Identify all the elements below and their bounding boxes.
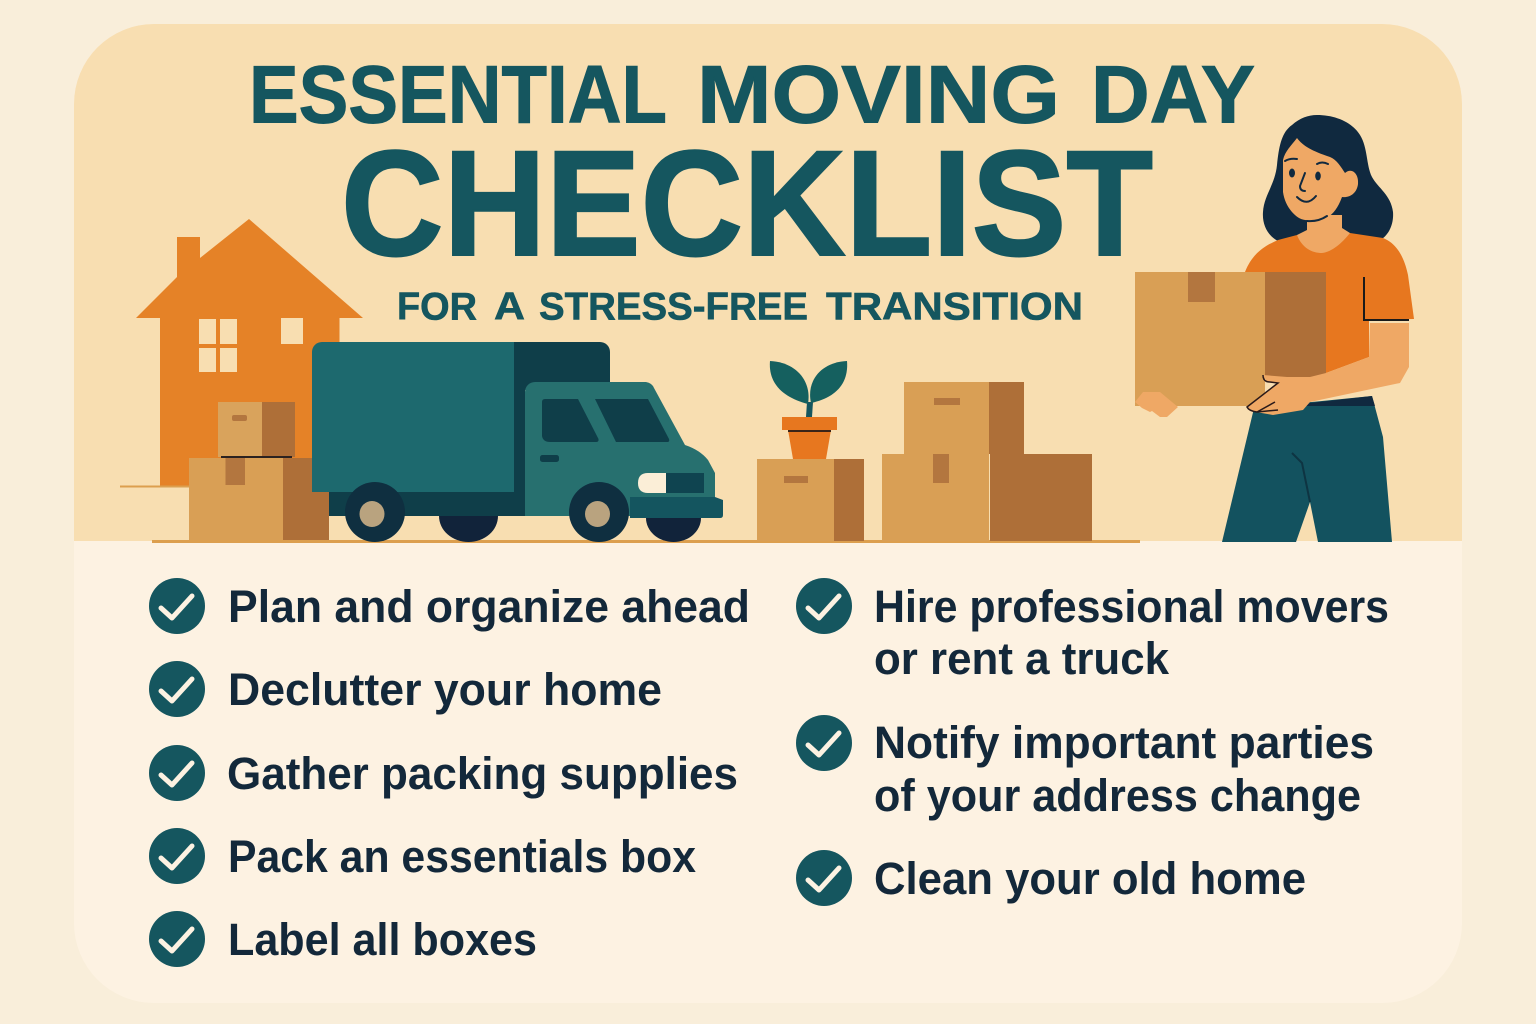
facial features <box>1285 159 1328 221</box>
face <box>1283 138 1358 221</box>
item: hire professional movers: Hire professional movers <box>874 581 1389 632</box>
subtitle: STRESS-FREE <box>539 286 808 328</box>
icon: moving truck <box>312 342 723 542</box>
icon: house <box>120 219 363 487</box>
arm and hand <box>1247 323 1409 415</box>
heading line one: MOVING <box>697 50 1060 140</box>
item: notify important parties: of your address change <box>874 770 1361 821</box>
heading line one: ESSENTIAL <box>249 50 667 140</box>
checklist column one <box>149 578 750 967</box>
item: plan and organize ahead: Plan and organize ahead <box>228 581 750 632</box>
item: declutter your home: Declutter your home <box>228 664 662 715</box>
item: hire professional movers: or rent a truck <box>874 633 1170 684</box>
icon: woman holding a box <box>1135 115 1414 542</box>
pants <box>1222 396 1392 542</box>
panel: upper illustration background <box>74 24 1462 541</box>
ground line <box>152 540 1140 543</box>
icon: stacked boxes by the truck <box>189 402 329 540</box>
item: notify important parties: Notify important parties <box>874 717 1374 768</box>
item: pack an essentials box: Pack an essentials box <box>228 831 696 882</box>
sleeve line <box>1364 277 1409 320</box>
subtitle: TRANSITION <box>826 286 1083 328</box>
item: gather packing supplies: Gather packing supplies <box>227 748 738 799</box>
item: notify important parties <box>796 715 1374 821</box>
subtitle: A <box>494 286 525 328</box>
title <box>249 50 1255 328</box>
hair <box>1263 115 1393 241</box>
item: label all boxes: Label all boxes <box>228 914 537 965</box>
heading line one <box>249 50 1255 140</box>
checklist column two <box>796 578 1389 906</box>
heading line two: CHECKLIST <box>341 119 1153 287</box>
belt <box>1305 396 1375 406</box>
icon: box stack <box>882 382 1092 541</box>
icon: potted plant on box <box>757 361 864 541</box>
item: clean your old home: Clean your old home <box>874 853 1306 904</box>
item: hire professional movers <box>796 578 1389 684</box>
subtitle <box>397 286 1083 328</box>
shirt <box>1245 233 1414 373</box>
neck <box>1297 215 1350 253</box>
left hand <box>1135 392 1178 417</box>
box held <box>1135 272 1265 406</box>
heading line one: DAY <box>1091 50 1255 140</box>
subtitle: FOR <box>397 286 477 328</box>
